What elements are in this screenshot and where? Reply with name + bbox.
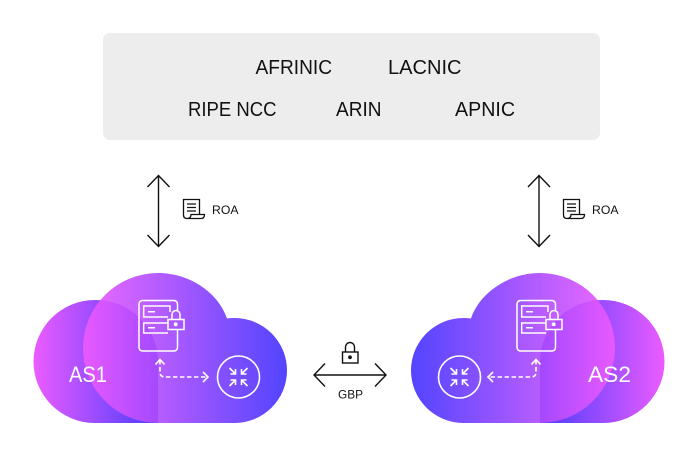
cloud main body (83, 273, 287, 423)
arrow: dashed route flow (156, 360, 208, 382)
label: AS1: AS1 (69, 362, 107, 387)
registry: APNIC: APNIC (455, 99, 515, 121)
icon: BGP lock (342, 342, 358, 363)
icon: server with lock (139, 300, 184, 351)
cloud main body (411, 273, 615, 423)
arrow: BGP two-way (314, 364, 386, 386)
label: right ROA: ROA (592, 203, 618, 217)
arrow: right ROA two-way (528, 175, 550, 247)
icon: router (438, 356, 480, 398)
label: AS2: AS2 (588, 362, 631, 387)
label: GBP: GBP (338, 390, 363, 402)
registry: RIPE NCC: RIPE NCC (188, 99, 276, 121)
icon: right ROA document (564, 200, 584, 218)
arrow: dashed route flow (488, 360, 540, 382)
icon: left ROA document (184, 200, 204, 218)
icon: server with lock (517, 300, 562, 351)
cloud: AS2 (411, 273, 664, 423)
label: left ROA: ROA (212, 203, 238, 217)
arrow: left ROA two-way (148, 175, 170, 247)
cloud back lobe (540, 300, 664, 423)
registry: ARIN: ARIN (336, 99, 382, 121)
registry: AFRINIC: AFRINIC (256, 57, 332, 79)
cloud back lobe (33, 300, 158, 423)
panel: regional internet registries (103, 33, 600, 140)
icon: router (218, 356, 260, 398)
registry: LACNIC: LACNIC (388, 57, 462, 79)
cloud: AS1 (33, 273, 287, 423)
